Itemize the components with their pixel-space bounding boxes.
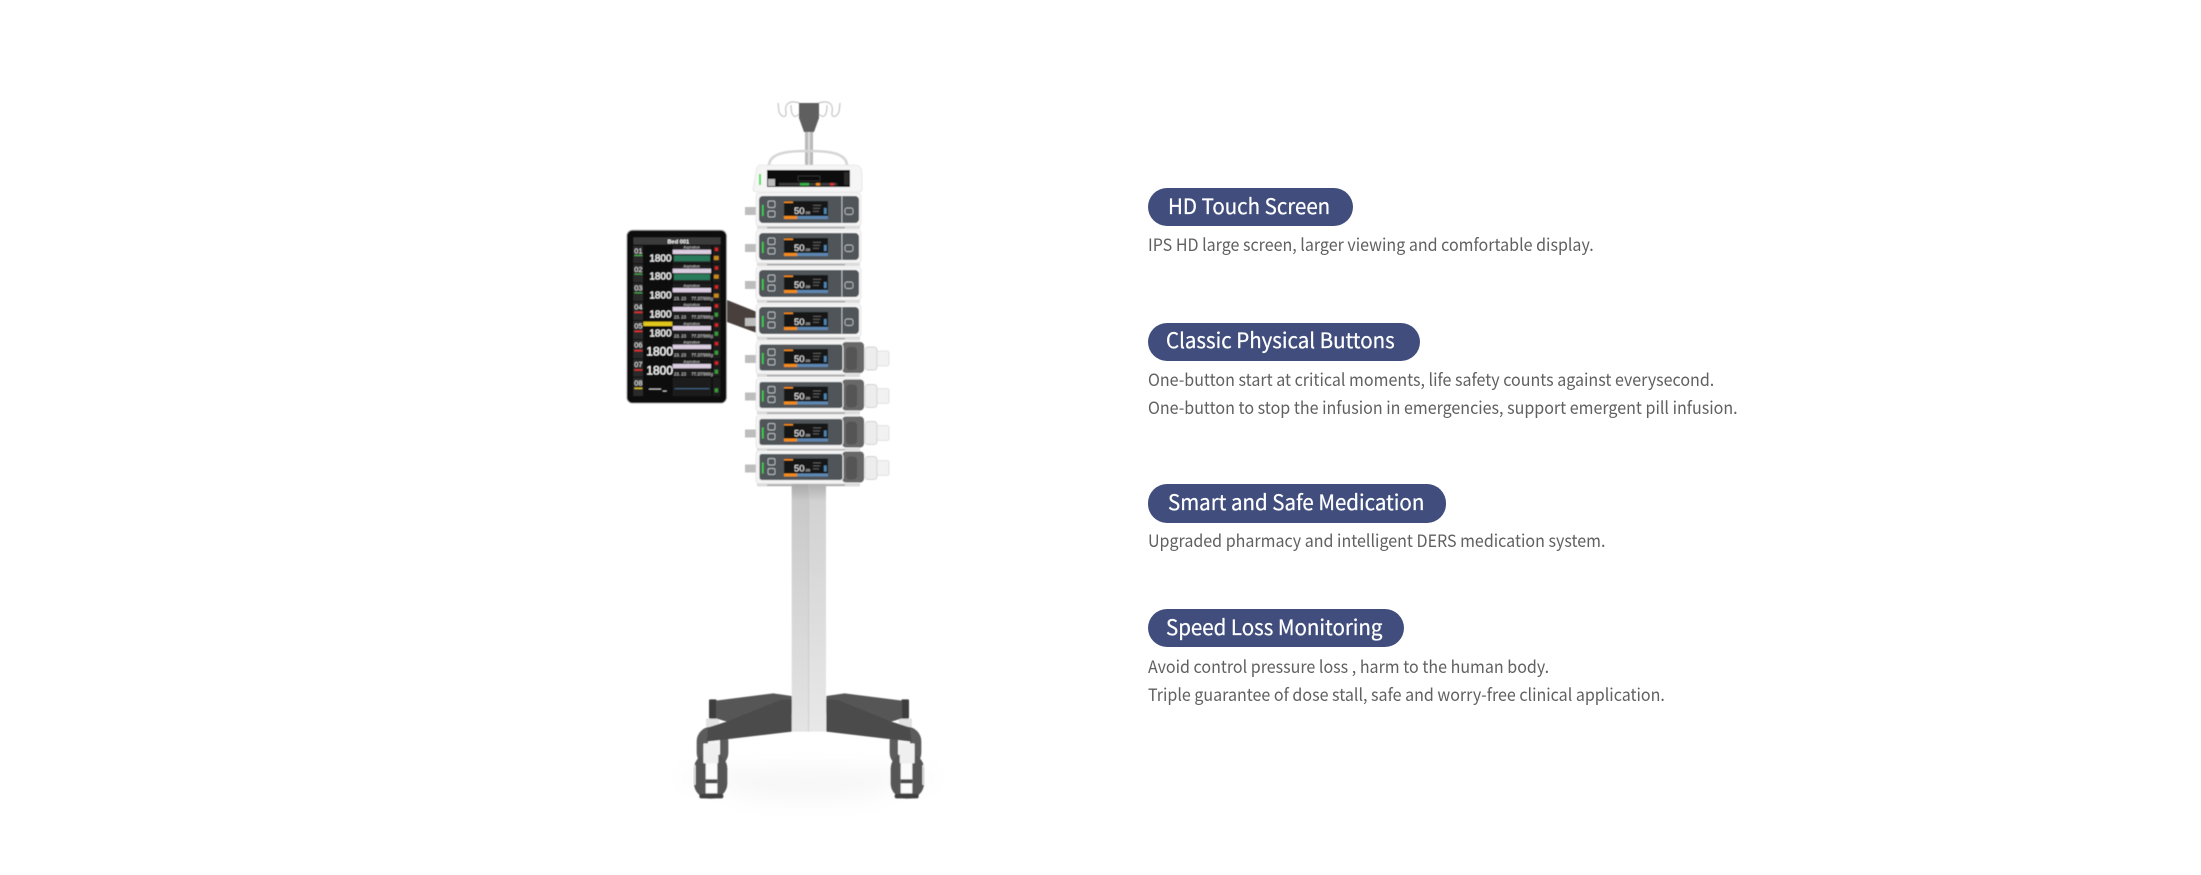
description	[1148, 366, 1738, 419]
pump 3: 50.00	[794, 280, 811, 291]
row 01: 01	[634, 246, 642, 255]
row 07: 77.37/999g	[691, 372, 714, 377]
row 07: Aspiration	[684, 360, 700, 364]
row 06: Aspiration	[684, 341, 700, 345]
row 01: Aspiration	[684, 246, 700, 250]
pump 3	[745, 267, 861, 303]
row 02: Aspiration	[684, 265, 700, 269]
pump 2	[745, 230, 861, 266]
pump 6 with syringe: 50.00	[794, 392, 811, 402]
row 07: 23. 23	[674, 372, 687, 377]
feature: Smart and Safe Medication	[1148, 484, 1605, 552]
description: One-button to stop the infusion in emergencies, support emergent pill infusion.	[1148, 394, 1738, 419]
row 03: 03	[634, 284, 642, 293]
pill heading: Smart and Safe Medication	[1168, 487, 1424, 517]
row 02	[633, 264, 721, 283]
row 02: 1800	[649, 272, 672, 283]
pill heading: Speed Loss Monitoring	[1166, 612, 1382, 642]
tablet monitor: Bed 001	[667, 239, 689, 245]
row 06: 1800	[646, 345, 673, 359]
pump 8 with syringe: 50.00	[794, 464, 811, 474]
pill heading	[1148, 484, 1446, 523]
row 04: Aspiration	[684, 303, 700, 307]
row 04	[633, 302, 721, 320]
row 04: 77.37/999g	[691, 315, 714, 320]
row 07: 1800	[646, 364, 673, 378]
pump 5 with syringe: 50.00	[794, 354, 811, 365]
row 01: 1800	[649, 254, 672, 265]
row 05: 05	[634, 322, 642, 331]
row 03: 1800	[649, 290, 672, 301]
row 01	[633, 246, 721, 265]
feature: Speed Loss Monitoring	[1148, 609, 1665, 706]
pill heading	[1148, 323, 1420, 361]
pill heading	[1148, 188, 1353, 226]
row 07	[633, 359, 721, 378]
feature: HD Touch Screen	[1148, 188, 1594, 256]
description: One-button start at critical moments, life safety counts against everysecond.	[1148, 366, 1714, 391]
tablet monitor	[627, 230, 727, 403]
row 06	[633, 340, 721, 359]
IV pole with hooks	[769, 102, 847, 168]
row 02: 02	[634, 265, 642, 274]
description: Upgraded pharmacy and intelligent DERS medication system.	[1148, 527, 1605, 552]
row 06: 06	[634, 341, 642, 350]
row 05: 77.37/999g	[691, 333, 714, 338]
pump 8 with syringe	[745, 450, 889, 486]
pill heading: Classic Physical Buttons	[1166, 325, 1395, 355]
row 03: 23. 23	[674, 296, 687, 301]
row 04: 04	[634, 303, 642, 312]
row 03: Aspiration	[684, 284, 700, 288]
description: Avoid control pressure loss , harm to the human body.	[1148, 653, 1549, 678]
row 07: 07	[634, 360, 642, 369]
row 03	[633, 283, 721, 301]
pill heading	[1148, 609, 1404, 647]
description: Triple guarantee of dose stall, safe and worry-free clinical application.	[1148, 681, 1665, 706]
pump 6 with syringe	[745, 378, 889, 414]
pill heading: HD Touch Screen	[1168, 191, 1330, 221]
pump 1	[745, 193, 861, 229]
workstation head unit	[753, 165, 862, 192]
pump 7 with syringe	[745, 416, 889, 452]
pump 5 with syringe	[745, 341, 889, 377]
row 06: 23. 23	[674, 353, 687, 358]
row 03: 77.37/999g	[691, 296, 714, 301]
row 05	[633, 321, 721, 339]
connecting arm	[727, 300, 757, 333]
pump 1: 50.00	[794, 206, 811, 217]
description: IPS HD large screen, larger viewing and comfortable display.	[1148, 231, 1594, 256]
floor shadow	[678, 768, 938, 801]
row 08: 08	[634, 378, 642, 387]
pump 7 with syringe: 50.00	[794, 428, 811, 440]
row 04: 1800	[649, 309, 672, 320]
pump 2: 50.00	[794, 243, 811, 254]
row 08	[633, 378, 721, 396]
description	[1148, 653, 1665, 706]
stand base with legs and wheels	[694, 484, 924, 799]
row 05: 1800	[649, 328, 672, 339]
row 05: 23. 23	[674, 333, 687, 338]
row 06: 77.37/999g	[691, 353, 714, 358]
pump 4: 50.00	[794, 317, 811, 328]
pump 4	[745, 304, 861, 340]
feature: Classic Physical Buttons	[1148, 323, 1738, 419]
row 05: Aspiration	[684, 322, 700, 326]
row 04: 23. 23	[674, 315, 687, 320]
